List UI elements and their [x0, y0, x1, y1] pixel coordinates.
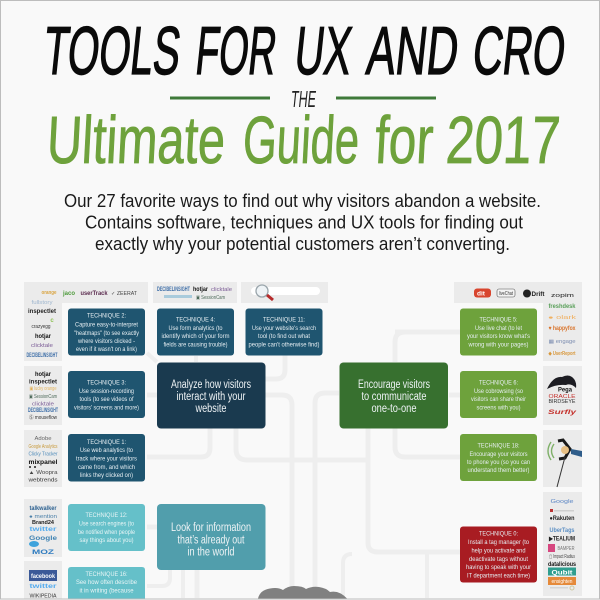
- title: FOR: [192, 13, 280, 89]
- panel: tag manager logos: datalicious: [548, 562, 577, 568]
- panel: tag manager logos: Google: [550, 499, 574, 505]
- panel: technique 12: Use search engines (to: [79, 520, 134, 528]
- panel: search box icon: [241, 282, 328, 303]
- panel: social listening logos: Brand24: [32, 520, 54, 526]
- panel: technique 4: [157, 308, 234, 356]
- panel: technique 0: deactivate tags without: [469, 556, 528, 563]
- panel: heatmap tool logos: ✓ ZEERAT: [111, 291, 137, 297]
- panel: web analytics logos: Google Analytics: [28, 444, 58, 450]
- panel: heatmap tool logos: [24, 282, 148, 361]
- panel: technique 4: identify which of your form: [162, 333, 230, 340]
- panel: session recording logos: ▣ lucky orange: [30, 386, 57, 392]
- panel: technique 2: "heatmaps" (to see exactly: [74, 330, 140, 337]
- panel: technique 3: visitors' screens and more): [74, 404, 139, 412]
- panel: technique 6: visitors can share their: [471, 396, 526, 403]
- heading: ultimate guide: 2017: [444, 103, 562, 178]
- panel: heatmap tool logos: userTrack: [80, 291, 108, 297]
- panel: heatmap tool logos: DECIBELINSIGHT: [26, 353, 58, 359]
- panel: web analytics logos: Clicky Tracker: [28, 452, 58, 458]
- panel: form analytics logos: hotjar: [193, 287, 209, 293]
- panel: session recording logos: inspectlet: [29, 380, 57, 386]
- panel: heatmap tool logos: hotjar: [35, 334, 52, 340]
- panel: live chat logos: dit: [477, 292, 485, 298]
- panel: heatmap tool logos: fullstory: [32, 300, 53, 306]
- panel: technique 11: [246, 308, 322, 356]
- panel: technique 0: help you activate and: [472, 548, 526, 554]
- panel: cobrowsing logos: Pega: [558, 388, 573, 394]
- subtitle divider: the: [170, 86, 436, 112]
- panel: analyze how visitors: website: [195, 403, 226, 415]
- intro text block: Our 27 favorite ways to find out why visitors abandon a website.: [64, 191, 541, 211]
- panel: technique 18: TECHNIQUE 18:: [478, 442, 520, 450]
- panel: analyze how visitors: [157, 362, 266, 428]
- panel: session recording logos: clicktale: [32, 402, 54, 408]
- panel: encourage visitors: one-to-one: [372, 403, 416, 415]
- panel: technique 0: TECHNIQUE 0:: [479, 530, 518, 538]
- title: AND: [363, 13, 462, 89]
- panel: technique 12: TECHNIQUE 12:: [86, 512, 128, 519]
- panel: web analytics logos: ▲ Woopra: [28, 470, 58, 476]
- panel: review site logos: facebook: [31, 574, 56, 580]
- panel: technique 16: it in writing (because: [80, 588, 134, 594]
- panel: technique 6: [460, 371, 537, 418]
- title: TOOLS: [40, 13, 184, 89]
- panel: technique 2: TECHNIQUE 2:: [87, 312, 126, 320]
- panel: technique 3: [68, 371, 145, 418]
- panel: heatmap tool logos: orange: [42, 290, 57, 296]
- panel: review site logos: WIKIPEDIA: [30, 594, 57, 600]
- panel: technique 3: Use session-recording: [79, 388, 134, 395]
- intro text block: Contains software, techniques and UX tools for finding out: [85, 212, 523, 232]
- panel: technique 11: tool (to find out what: [258, 333, 310, 340]
- panel: technique 4: Use form analytics (to: [168, 325, 223, 332]
- panel: review site logos: [24, 561, 62, 600]
- panel: tag manager logos: BAMPER: [558, 546, 575, 552]
- panel: live chat logos: zopim: [551, 293, 574, 299]
- intro text block: [64, 191, 541, 254]
- panel: technique 11: Use your website's search: [252, 325, 316, 332]
- panel: session recording logos: DECIBELINSIGHT: [28, 408, 58, 414]
- panel: tag manager logos: [543, 492, 582, 596]
- panel: review site logos: twitter: [30, 584, 57, 590]
- panel: technique 6: TECHNIQUE 6:: [479, 380, 518, 386]
- panel: technique 5: your visitors know what's: [467, 333, 530, 340]
- panel: tag manager logos: ensighten: [552, 579, 573, 585]
- panel: technique 5: TECHNIQUE 5:: [480, 316, 518, 324]
- panel: look for information: in the world: [188, 546, 234, 558]
- heading: ultimate guide: for: [373, 103, 435, 178]
- panel: web analytics logos: mixpanel: [28, 460, 58, 466]
- panel: tag manager logos: UberTags: [550, 528, 575, 534]
- panel: technique 1: links they clicked on): [80, 472, 133, 479]
- panel: look for information: that’s already out: [178, 534, 245, 546]
- panel: live chat logos: ▦ engage: [548, 339, 576, 345]
- panel: technique 4: TECHNIQUE 4:: [176, 316, 215, 324]
- panel: technique 1: Use web analytics (to: [80, 447, 133, 454]
- panel: technique 2: where visitors clicked -: [77, 338, 135, 345]
- panel: technique 0: [460, 526, 537, 582]
- panel: technique 1: [68, 434, 145, 482]
- panel: encourage visitors: Encourage visitors: [358, 379, 430, 391]
- panel: technique 18: to phone you (so you can: [467, 459, 530, 466]
- panel: technique 5: [460, 308, 537, 356]
- icon: cloud: [258, 586, 347, 598]
- panel: form analytics logos: DECIBELINSIGHT: [157, 287, 190, 293]
- panel: heatmap tool logos: jaco: [62, 291, 75, 297]
- panel: technique 1: track where your visitors: [76, 456, 137, 462]
- panel: heatmap tool logos: inspectlet: [28, 309, 56, 315]
- subtitle divider: the: THE: [291, 86, 316, 112]
- panel: technique 2: Capture easy-to-interpret: [75, 322, 138, 328]
- title: UX: [291, 13, 355, 89]
- panel: live chat logos: ◆ UserReport: [548, 351, 576, 357]
- panel: technique 5: wrong with your pages): [468, 342, 528, 348]
- panel: technique 2: even if it wasn't on a link): [76, 346, 137, 353]
- panel: analyze how visitors: interact with your: [176, 391, 246, 403]
- panel: technique 5: Use live chat (to let: [475, 325, 522, 332]
- panel: analyze how visitors: Analyze how visitors: [171, 379, 251, 391]
- panel: technique 18: Encourage your visitors: [470, 451, 528, 458]
- panel: live chat logos: ● olark: [548, 315, 577, 321]
- panel: technique 3: TECHNIQUE 3:: [87, 380, 126, 386]
- panel: session recording logos: hotjar: [35, 372, 52, 378]
- panel: phone icon: [543, 430, 582, 487]
- panel: technique 11: people can't otherwise find): [248, 342, 320, 348]
- panel: social listening logos: [24, 499, 62, 557]
- panel: technique 4: fields are causing trouble): [164, 342, 228, 348]
- heading: ultimate guide: Guide: [241, 103, 361, 178]
- heading: ultimate guide: [45, 103, 562, 178]
- panel: technique 16: [68, 567, 145, 598]
- panel: web analytics logos: webtrends: [28, 478, 58, 484]
- panel: session recording logos: ▣ SessionCam: [29, 394, 57, 400]
- panel: encourage visitors: [340, 362, 448, 428]
- panel: web analytics logos: Adobe: [34, 436, 52, 442]
- panel: technique 3: tools (to see videos of: [80, 396, 134, 403]
- panel: social listening logos: talkwalker: [30, 506, 57, 512]
- panel: social listening logos: MOZ: [32, 550, 55, 556]
- panel: technique 0: having to speak with your: [466, 564, 531, 571]
- panel: session recording logos: [24, 366, 62, 425]
- panel: live chat logos: [454, 282, 582, 361]
- panel: cobrowsing logos: [543, 366, 582, 425]
- intro text block: exactly why your potential customers aren’t converting.: [95, 234, 510, 254]
- panel: tag manager logos: ▢ Impact Radius: [549, 554, 575, 560]
- panel: technique 12: be notified when people: [78, 529, 135, 536]
- title: [40, 13, 569, 89]
- panel: technique 6: Use cobrowsing (so: [474, 388, 523, 395]
- panel: live chat logos: ♥ happyfox: [548, 326, 576, 332]
- panel: tag manager logos: ▶TEALIUM: [548, 536, 575, 542]
- panel: technique 16: See how often describe: [76, 579, 137, 586]
- panel: technique 6: screens with you): [476, 404, 520, 412]
- panel: heatmap tool logos: crazyegg: [32, 324, 51, 330]
- panel: technique 12: [68, 504, 145, 551]
- panel: heatmap tool logos: c: [50, 318, 54, 324]
- panel: technique 2: [68, 308, 145, 356]
- panel: session recording logos: Ⓢ mouseflow: [29, 414, 57, 421]
- panel: technique 16: TECHNIQUE 16:: [86, 571, 128, 578]
- panel: live chat logos: freshdesk: [548, 304, 576, 310]
- panel: technique 0: IT department each time): [467, 572, 530, 580]
- panel: form analytics logos: [153, 282, 237, 303]
- heading: ultimate guide: Ultimate: [45, 103, 227, 178]
- panel: look for information: [157, 504, 266, 570]
- panel: cobrowsing logos: Surfly: [548, 410, 577, 416]
- panel: technique 18: [460, 434, 537, 481]
- panel: tag manager logos: Qubit: [552, 570, 572, 576]
- panel: technique 12: say things about you): [80, 537, 134, 544]
- panel: look for information: Look for information: [171, 522, 251, 534]
- panel: live chat logos: liveChat: [499, 291, 513, 297]
- panel: form analytics logos: ▣ SessionCam: [196, 295, 225, 301]
- panel: heatmap tool logos: clicktale: [31, 343, 53, 349]
- panel: social listening logos: twitter: [30, 527, 57, 533]
- panel: tag manager logos: ●Rakuten: [550, 516, 575, 522]
- panel: technique 11: TECHNIQUE 11:: [263, 316, 305, 324]
- panel: web analytics logos: [24, 430, 62, 487]
- panel: social listening logos: ● mention: [29, 514, 57, 520]
- panel: technique 1: came from, and which: [78, 464, 135, 471]
- panel: live chat logos: Drift: [532, 292, 544, 298]
- panel: technique 1: TECHNIQUE 1:: [87, 439, 126, 446]
- panel: cobrowsing logos: ORACLE: [548, 394, 576, 400]
- panel: encourage visitors: to communicate: [362, 391, 426, 403]
- panel: form analytics logos: clicktale: [211, 287, 232, 293]
- panel: cobrowsing logos: BIRDSEYE: [548, 399, 576, 405]
- panel: technique 0: Install a tag manager (to: [468, 539, 529, 546]
- panel: technique 18: understand them better): [468, 467, 530, 474]
- panel: social listening logos: Google: [29, 536, 58, 542]
